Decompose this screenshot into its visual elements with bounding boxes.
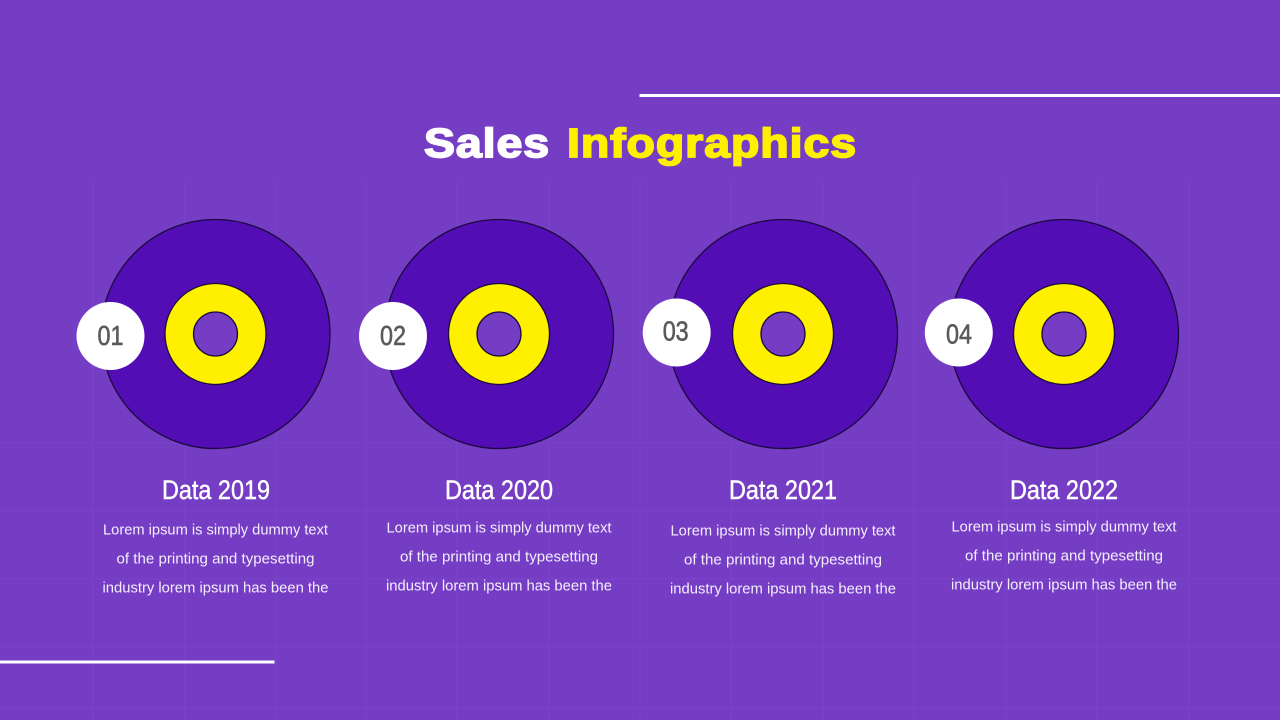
- number badge 02: [359, 302, 427, 370]
- body text 2019: Lorem ipsum is simply dummy text: [103, 522, 328, 538]
- title: Infographics: [567, 120, 857, 166]
- number badge 02: 02: [380, 320, 406, 351]
- title: [424, 120, 857, 166]
- number badge 04: 04: [946, 318, 972, 349]
- number badge 01: 01: [98, 320, 124, 351]
- body text 2020: Lorem ipsum is simply dummy text: [386, 520, 612, 536]
- body text 2019: of the printing and typesetting: [116, 552, 314, 568]
- icon: yellow ring 2022: [1014, 284, 1114, 384]
- heading 2021: Data 2021: [729, 475, 837, 505]
- body text 2021: of the printing and typesetting: [684, 552, 882, 568]
- body text 2022: of the printing and typesetting: [965, 548, 1163, 564]
- body text 2019: industry lorem ipsum has been the: [102, 580, 328, 596]
- number badge 03: [643, 298, 711, 366]
- icon: large disc 2019: [101, 220, 330, 448]
- number badge 01: [76, 302, 144, 370]
- panel: data 2021: [643, 220, 898, 598]
- icon: yellow ring 2019: [165, 284, 266, 384]
- body text 2021: Lorem ipsum is simply dummy text: [670, 524, 896, 540]
- body text 2020: [386, 520, 612, 594]
- icon: large disc 2021: [668, 220, 898, 448]
- icon: yellow ring 2021: [732, 284, 834, 384]
- heading 2020: Data 2020: [445, 475, 553, 505]
- icon: large disc 2022: [950, 220, 1178, 448]
- top accent line: [640, 94, 1280, 97]
- panel: data 2020: [359, 220, 614, 594]
- body text 2021: [670, 524, 896, 598]
- body text 2020: of the printing and typesetting: [400, 550, 598, 566]
- heading 2022: Data 2022: [1010, 475, 1118, 505]
- icon: yellow ring 2020: [448, 284, 550, 384]
- heading 2019: Data 2019: [162, 475, 270, 505]
- number badge 03: 03: [663, 316, 689, 347]
- panel: data 2022: [925, 220, 1178, 594]
- body text 2022: Lorem ipsum is simply dummy text: [952, 520, 1176, 536]
- body text 2019: [102, 522, 328, 596]
- body text 2022: industry lorem ipsum has been the: [951, 578, 1177, 594]
- number badge 04: [925, 298, 993, 366]
- body text 2020: industry lorem ipsum has been the: [386, 578, 612, 594]
- panel: data 2019: [76, 220, 330, 596]
- body text 2022: [951, 520, 1177, 594]
- bottom accent line: [0, 660, 274, 664]
- body text 2021: industry lorem ipsum has been the: [670, 582, 896, 598]
- title: Sales: [424, 120, 550, 166]
- icon: large disc 2020: [384, 220, 614, 448]
